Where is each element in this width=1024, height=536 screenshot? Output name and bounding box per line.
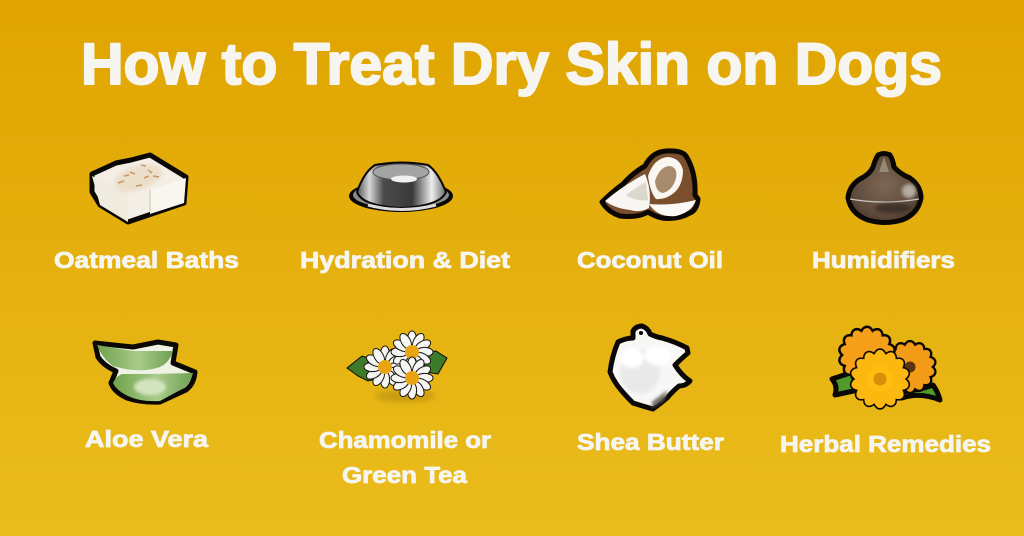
label: Aloe Vera [85, 426, 209, 452]
flower top [391, 331, 433, 373]
leaves [832, 372, 940, 400]
flower top left [839, 328, 895, 382]
item: humidifiers [812, 154, 955, 273]
icon: coconut [602, 151, 698, 218]
item: shea butter [577, 326, 724, 455]
label: Humidifiers [812, 247, 955, 273]
label: Herbal Remedies [780, 431, 991, 457]
title: How to Treat Dry Skin on Dogs [81, 32, 942, 97]
label: Chamomile or [319, 427, 491, 453]
flower right [884, 342, 936, 392]
icon: marigold flowers [832, 328, 940, 408]
item: hydration and diet [300, 162, 510, 273]
icon: oatmeal soap [92, 155, 186, 222]
item: coconut oil [577, 151, 723, 273]
icon: aloe slices [95, 342, 195, 402]
icon: steel bowl [349, 162, 453, 212]
icon: shea butter [610, 326, 690, 409]
item: chamomile or green tea [319, 331, 491, 488]
label line 2: Green Tea [342, 462, 468, 488]
item: herbal remedies [780, 328, 991, 457]
icon: chamomile flowers [347, 331, 447, 402]
item: oatmeal baths [54, 155, 239, 273]
label: Oatmeal Baths [54, 247, 239, 273]
flower bottom [391, 357, 433, 399]
flower front [850, 350, 910, 408]
label: Shea Butter [577, 429, 724, 455]
icon: wood humidifier [848, 154, 921, 222]
item: aloe vera [85, 342, 209, 452]
label: Coconut Oil [577, 247, 723, 273]
label: Hydration & Diet [300, 247, 510, 273]
flower left [364, 346, 406, 388]
